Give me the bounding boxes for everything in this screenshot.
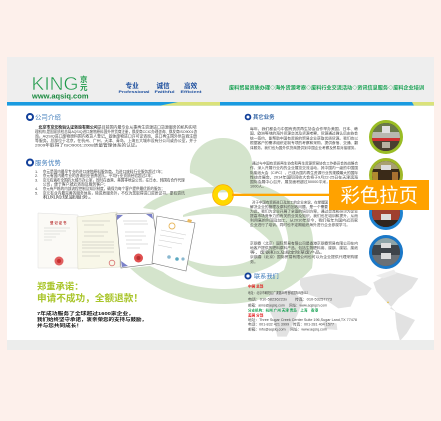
header band xyxy=(7,57,434,106)
green swirl background xyxy=(130,138,313,304)
promise text: 并与您共同成长！ xyxy=(37,322,82,329)
certificate 1 xyxy=(38,213,78,268)
callout: colour fold-out: 彩色拉页 xyxy=(340,185,418,207)
list: service advantages: 京元有业内最完善的服务体系，除资质服务外，不仅为您取得进口资质证书，更有资讯 xyxy=(43,190,185,195)
list: service advantages: 京元是国内最早专业的进口废物原料服务商，为进口废料行业服务超过7年； xyxy=(43,169,165,174)
connector line xyxy=(232,194,330,196)
slogan: professional, faithful, efficient: 高效 xyxy=(184,81,198,90)
promise text: 我们始终坚守承诺，衷亲荣您的支持与鼓励， xyxy=(37,316,147,323)
slogan: professional, faithful, efficient: Professional xyxy=(118,90,150,94)
text: other business: 性综合展会，2014年国际回收大会将于9月22-25日在天津滨海 xyxy=(250,174,358,179)
text: company intro: 等服务。总部位于北京，在杭州、广州、天津、青岛、上海五大城市设有分公司或办公室，并于 xyxy=(35,138,197,143)
contact details: 电话：010-58236223x 传真：010-53257773 xyxy=(248,296,332,301)
logo: KING 京元: 元 xyxy=(80,83,88,92)
logo: KING 京元: 京 xyxy=(80,74,88,84)
contact details: 地址：Three Sugar Creek Center Suite 196,Sugar Land,TX 77478 xyxy=(248,317,357,322)
list: service advantages: 京元有国内最专业的咨询创业营养团队，平均行业资质经验超过2年； xyxy=(43,173,155,178)
world map xyxy=(268,270,418,341)
list: service advantages: 2. xyxy=(35,173,38,178)
contact details: 中国 总部 xyxy=(248,284,264,289)
list: service advantages xyxy=(35,169,185,200)
certificate 1: 登 记 证 书 xyxy=(50,220,67,225)
text: company intro xyxy=(35,124,197,148)
text: other business: 提高市场竞争力的有关的业务及知识，我们也在培训和提升，从而 xyxy=(250,213,358,218)
slogan: professional, faithful, efficient xyxy=(118,81,203,94)
text: other business: 国际会展中心召开，展览面积超过50000平米， xyxy=(250,179,330,184)
icon: section bullet, contact xyxy=(245,273,251,279)
list: service advantages: 5. xyxy=(35,190,38,195)
certificate 3 xyxy=(116,213,160,268)
promise heading xyxy=(37,280,143,304)
brochure spread xyxy=(7,57,434,350)
list: service advantages: 3. xyxy=(35,177,38,182)
slogan: professional, faithful, efficient: 专业 xyxy=(126,81,139,90)
yellow ring marker xyxy=(213,185,233,205)
photo badge 2 xyxy=(369,158,403,180)
list: service advantages: 和风险规避服务。 xyxy=(43,195,95,200)
text: other business: 对于中国有资质进口及加工的企业来说，在掌握国 xyxy=(252,199,328,204)
contact details: 电话：001-832 421 3999 传真：001-281 404 1577 xyxy=(248,322,334,327)
text: other business: 企业进行了培训，同时也不定期组织海外进行企业参观学习。 xyxy=(250,222,350,227)
logo: KING 京元 xyxy=(31,73,89,101)
contact details: 邮箱：info@aqsiq.com 网址：www.aqsiq.com xyxy=(248,326,327,331)
list: service advantages: 公司，便于客户就近咨询及服务客户； xyxy=(43,182,108,187)
logo: KING 京元: KING xyxy=(32,73,78,94)
text: other business: 等，废钢和以及规定除草废产品。 xyxy=(250,249,325,254)
certificate 2 xyxy=(77,212,120,269)
photo badge 1 xyxy=(370,122,402,153)
text: other business: 通过与中国有资质再生协会和再生资源贸易协会工作委员会的战略合 xyxy=(252,160,358,166)
text: other business: 京钢春（北京）国际贸易有限公司也可以为企业提供代理采购服 xyxy=(250,254,358,259)
text: other business: 务。 xyxy=(250,259,258,264)
slogan: professional, faithful, efficient: Efficient xyxy=(180,90,203,94)
text: other business: 为此，我们为企业开展了全面的培训方案，通过交流和研讨为企业 xyxy=(250,208,358,213)
text: other business: 根据客户的需求组织定制专项的考察和采购，提供食宿、交通、翻 xyxy=(250,140,358,145)
text: other business xyxy=(250,126,358,264)
contact details: 分支机构：杭州 广州 天津 青岛 上海 香港 xyxy=(248,308,318,313)
icon: section bullet, service advantages xyxy=(27,160,33,166)
text: other business: 作，深入开展行业内的企业展览交流活动，其中国内一级的中国国 xyxy=(250,165,358,170)
text: other business: 解决企业的管理及原料的回收问题，是一个需要 xyxy=(250,204,328,209)
certificate 4 xyxy=(152,216,195,271)
heading: company intro: 公司介绍 xyxy=(35,112,61,122)
promise heading: 申请不成功，全额退款！ xyxy=(37,292,143,304)
heading: other business: 其它业务 xyxy=(253,113,275,121)
callout: colour fold-out xyxy=(329,180,429,210)
text: company intro: 北京市京元检验认证咨询有限公司是目前国内最专业从事再生资源进口货源服务的机构实吧 xyxy=(38,124,197,130)
promise text xyxy=(37,310,147,329)
photo badge 3 xyxy=(369,210,403,230)
contact details: 邮箱：aims@aqsiq.com 网址：www.aqsiqcn.com xyxy=(248,303,327,308)
text: company intro: 询，AQSIQ进口废物原料国内收货人登记、固体废物进口许可证咨询、进口再生国外供货商注册 xyxy=(35,134,197,138)
service tagline: 废料贸易资质办理◇海外货源考察◇废料行业交流活动◇资讯信息服务◇废料企业培训 xyxy=(229,84,424,92)
list: service advantages: 京元有遍布全国的大城市办公室，同时在香港、美国等地设公司，在日本、韩国有合作代理 xyxy=(43,177,185,182)
logo: KING 京元: www.aqsiq.com xyxy=(31,92,89,101)
swirl: outer curve xyxy=(130,138,313,304)
text: company intro: 理机构,是国家质检总局AQSIQ进口废物原料国外供货商注册，换发商CCIC办理咨询、换发商ISO9001咨 xyxy=(35,129,197,134)
contact details xyxy=(248,284,357,331)
promise text: 7年成功服务了全球超过1600家企业， xyxy=(37,310,134,317)
text: other business: 译服务。我们也为国外供货商提供到中国企业考察及贸易对接服务。 xyxy=(250,145,358,150)
list: service advantages: 4. xyxy=(35,186,38,191)
text: company intro: 2009年取得了ISO9001:2008质量管理体系的认证。 xyxy=(35,142,140,148)
list: service advantages: 1. xyxy=(35,169,38,174)
text: other business: 每年，我们都会与中国有资质再生协会合作举办美国、日本、韩 xyxy=(250,126,358,131)
list: service advantages: 京元有严格的内部流程控制及知识制度，确保为每个客户提供最优质的服务； xyxy=(43,186,165,191)
heading: service advantages: 服务优势 xyxy=(35,158,61,167)
slogan: professional, faithful, efficient: Faithful xyxy=(154,90,174,94)
icon: section bullet, company intro xyxy=(27,114,33,120)
contact details: 地址：北京市朝阳区广渠路36号首城国际B座612 xyxy=(248,290,308,295)
slogan: professional, faithful, efficient: 诚信 xyxy=(156,81,170,90)
text: other business: 利用高的利润及加工，从2010年至今，我们每年为国内近百家 xyxy=(250,217,358,222)
photo badge 4 xyxy=(370,236,402,268)
icon: section bullet, other business xyxy=(246,115,250,119)
contact details: 美国 分部 xyxy=(248,313,264,318)
text: other business: 统一签约，能帮助中国有资质的贸易企业获取优质货源。我们也以 xyxy=(250,135,358,140)
footer band xyxy=(7,340,434,350)
text: other business: 1000人。 xyxy=(250,184,266,189)
promise heading: 郑重承诺： xyxy=(37,280,84,292)
page sheet xyxy=(7,57,434,350)
text: other business: 地客户提供的肥料原料产品，包括生物肥料用、废钢、废铝、废纸 xyxy=(250,245,358,250)
text: other business: 国、欧洲等地的海外货源交流及货源考察，货源通过确认后由协会 xyxy=(250,131,358,136)
certificates xyxy=(38,212,195,271)
swirl: inner curve xyxy=(180,206,284,277)
text: other business: 际废纸大会（CIPC），已成为国内再生资源行业的规模最大的国际 xyxy=(250,170,358,175)
photo badges xyxy=(370,122,402,268)
text: other business: 京钢春（北京）国际贸易有限公司是香港京钢春贸易有限公司在内 xyxy=(250,240,358,245)
heading: contact us: 联系我们 xyxy=(254,272,279,280)
